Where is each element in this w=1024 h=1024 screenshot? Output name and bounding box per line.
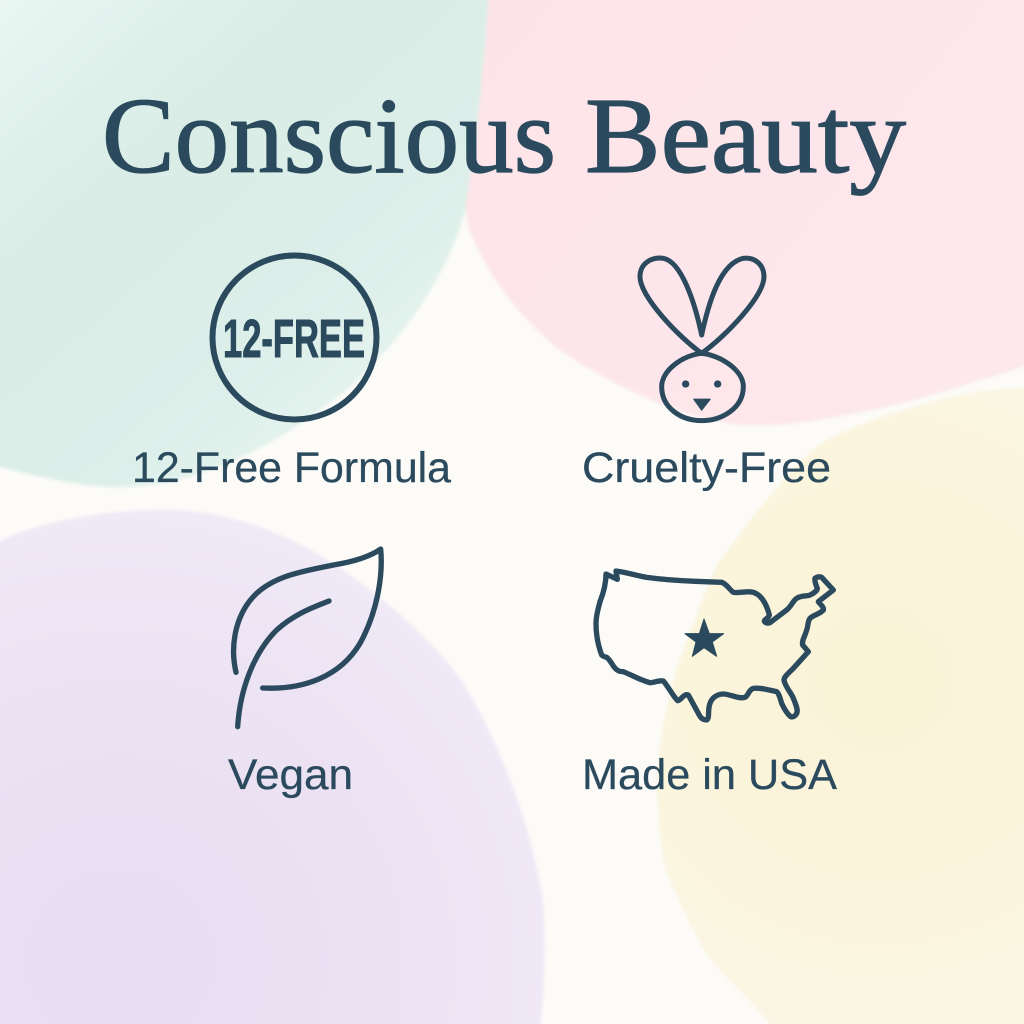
title: Beauty — [585, 77, 906, 196]
label: Cruelty-Free: Cruelty-Free — [582, 444, 831, 492]
title: Conscious — [102, 77, 556, 196]
title — [102, 77, 906, 196]
badge text: 12-FREE — [223, 309, 365, 369]
rabbit head — [662, 353, 743, 421]
star — [685, 619, 724, 656]
icon: USA map — [596, 571, 833, 720]
rabbit eyes — [682, 380, 721, 388]
label: Made in USA: Made in USA — [582, 751, 837, 799]
icon: 12-free circle — [212, 256, 376, 420]
rabbit nose — [694, 399, 710, 410]
leaf outline — [234, 549, 381, 688]
icon: leaf — [234, 549, 381, 727]
label: Vegan: Vegan — [228, 751, 353, 799]
badge: 12-Free — [212, 256, 376, 420]
icon: rabbit — [640, 258, 764, 421]
leaf vein — [238, 601, 329, 727]
rabbit ears — [640, 258, 764, 353]
USA outline — [596, 571, 833, 720]
label: 12-Free Formula: 12-Free Formula — [132, 444, 451, 492]
